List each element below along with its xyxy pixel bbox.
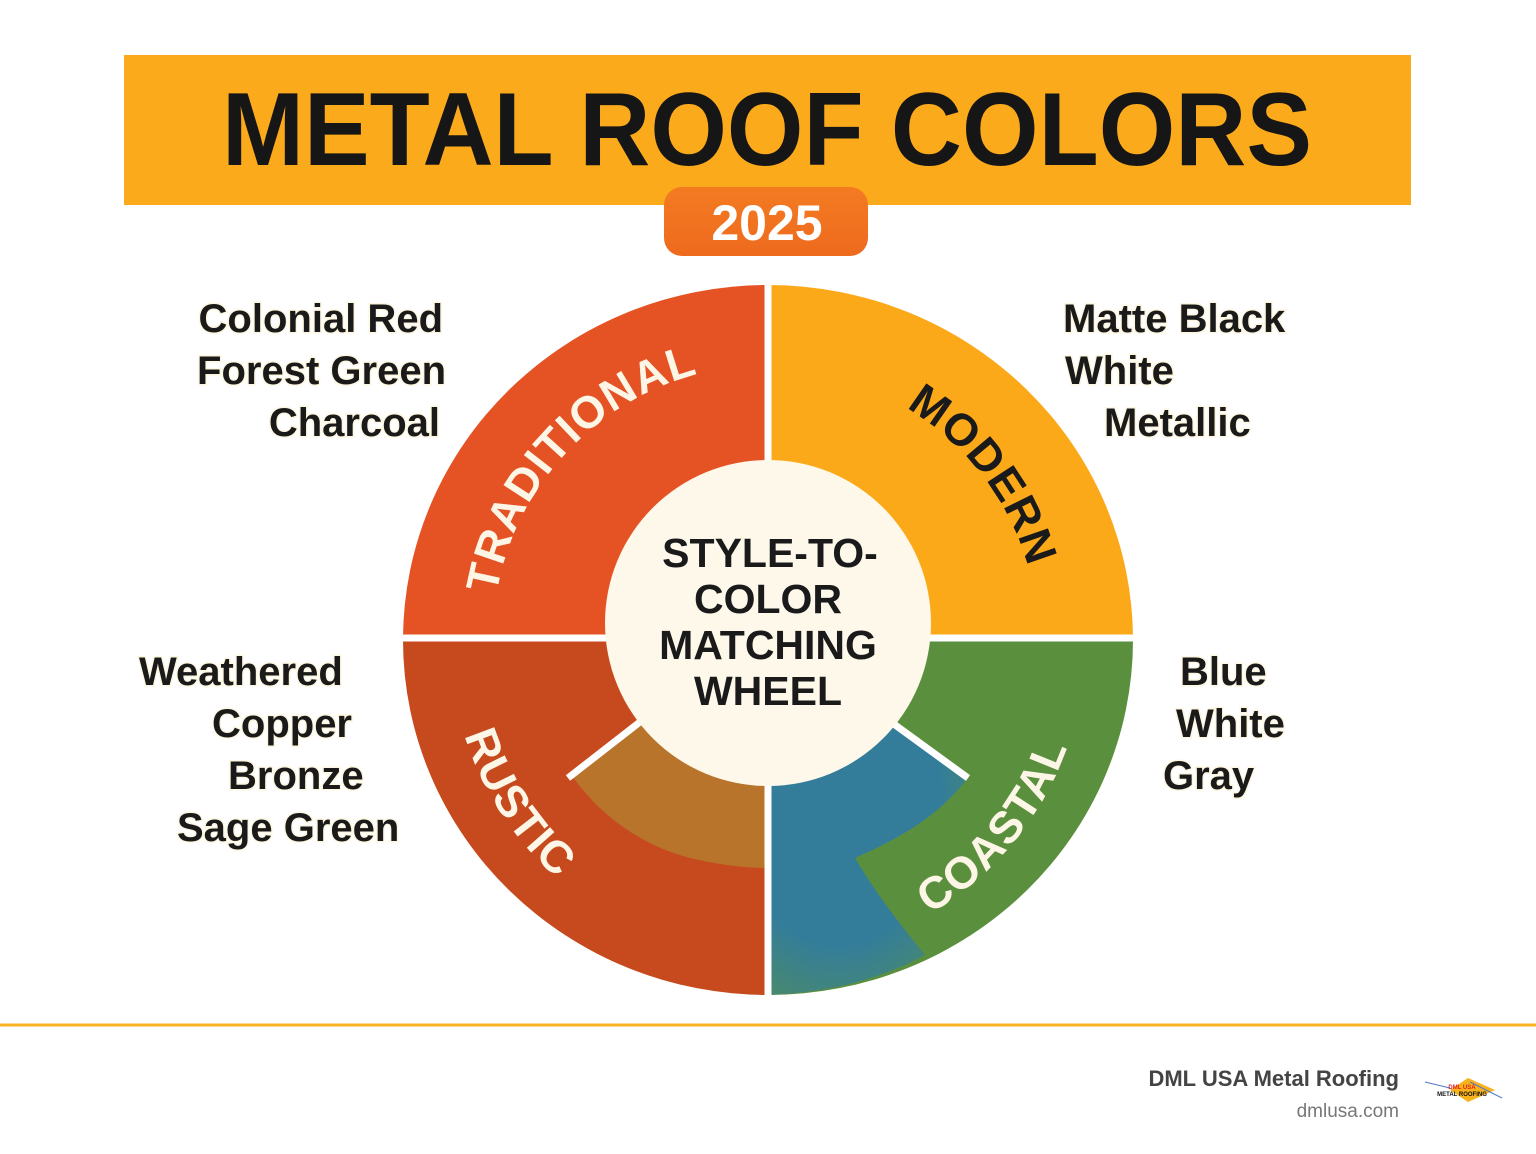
label: rustic: RUSTIC (465, 727, 573, 873)
label: traditional: TRADITIONAL (466, 350, 696, 588)
center hub: WHEEL (694, 668, 842, 714)
segment: coastal (768, 640, 1133, 995)
colors: rustic (139, 650, 399, 850)
colors: traditional: Colonial Red (199, 297, 443, 341)
colors: coastal: Gray (1163, 754, 1255, 798)
coastal inner blue band (768, 722, 968, 995)
colors: modern: White (1065, 349, 1174, 393)
color wheel (403, 285, 1133, 995)
segment: rustic (403, 640, 768, 995)
logo: DML USA (1448, 1085, 1476, 1091)
colors: coastal: Blue (1180, 650, 1267, 694)
colors: modern (1063, 297, 1286, 445)
center hub (605, 460, 931, 786)
label: coastal: COASTAL (919, 746, 1067, 908)
colors: rustic: Sage Green (177, 806, 399, 850)
center hub: COLOR (694, 576, 842, 622)
year badge: 2025 (711, 195, 823, 251)
logo: METAL ROOFING (1437, 1092, 1487, 1098)
colors: traditional (197, 297, 446, 445)
colors: coastal: White (1176, 702, 1285, 746)
center hub: STYLE-TO- (662, 530, 878, 576)
footer brand (1148, 1066, 1399, 1122)
title banner (124, 55, 1411, 205)
colors: modern: Metallic (1104, 401, 1251, 445)
colors: coastal (1163, 650, 1285, 798)
label: modern: MODERN (908, 383, 1057, 564)
colors: traditional: Forest Green (197, 349, 446, 393)
title: METAL ROOF COLORS (222, 72, 1312, 188)
colors: rustic: Bronze (228, 754, 364, 798)
colors: rustic: Copper (212, 702, 352, 746)
footer brand: DML USA Metal Roofing (1148, 1066, 1399, 1091)
colors: rustic: Weathered (139, 650, 343, 694)
center hub: MATCHING (659, 622, 877, 668)
segment: traditional (403, 285, 768, 640)
year badge (664, 187, 868, 256)
segment: modern (768, 285, 1133, 640)
rustic inner copper band (572, 718, 768, 868)
dividers (398, 280, 1138, 1000)
colors: traditional: Charcoal (269, 401, 440, 445)
footer brand: dmlusa.com (1297, 1101, 1399, 1122)
colors: modern: Matte Black (1063, 297, 1286, 341)
logo (1425, 1078, 1502, 1102)
